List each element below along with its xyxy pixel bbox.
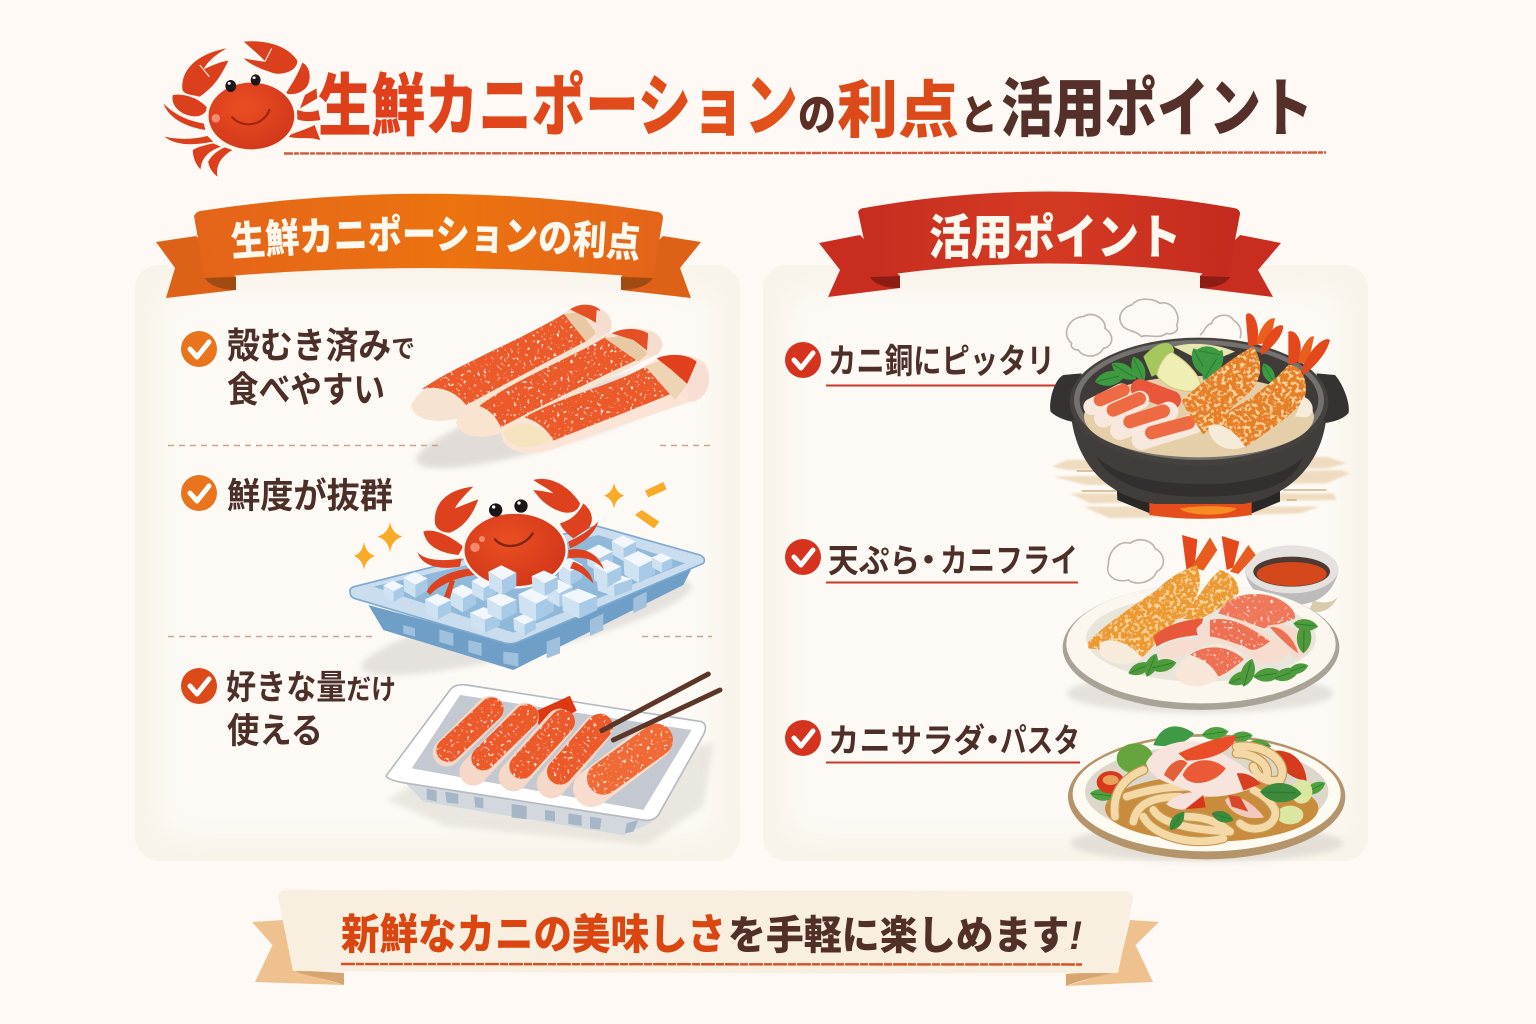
tempura shrimp	[1182, 313, 1330, 449]
closing message: 新鮮なカニの美味しさ	[341, 911, 726, 958]
use 3	[785, 720, 1080, 762]
underline	[826, 762, 1080, 764]
text: crab salad, pasta: パスタ	[1000, 722, 1080, 759]
text: tempura, crab fry: カニフライ	[940, 542, 1078, 579]
benefit 3	[181, 668, 396, 751]
underline	[826, 582, 1078, 584]
text: tempura, crab fry: 天ぷら	[828, 542, 920, 579]
icon: red check	[785, 720, 821, 756]
mat	[1052, 457, 1350, 518]
tempura	[1088, 535, 1256, 664]
vegetables	[1094, 342, 1277, 387]
salad greens and tomato	[1089, 726, 1328, 824]
title: 利点	[837, 77, 959, 146]
leg three	[501, 355, 709, 453]
base and burner	[1117, 485, 1280, 519]
banner underline	[341, 963, 1082, 966]
crab rolls	[1092, 388, 1193, 440]
ribbon heading: usage: 活用ポイント	[929, 212, 1181, 265]
title: の	[798, 91, 836, 140]
illustration: crab pasta plate	[1068, 726, 1345, 862]
icon: red check	[785, 539, 821, 575]
text: perfect for crab hotpot: カニ銅にピッタリ	[828, 343, 1055, 381]
noodles	[1115, 746, 1282, 841]
title underline	[284, 152, 1326, 154]
steam	[1067, 299, 1241, 356]
title: 生鮮カニポーション	[318, 69, 798, 145]
benefit 2	[181, 475, 393, 516]
crab	[417, 479, 604, 598]
icon: orange check	[181, 331, 217, 367]
text: peeled and easy to eat: 食べやすい	[227, 369, 385, 410]
text: tempura, crab fry: ・	[912, 542, 945, 579]
tray	[350, 526, 704, 670]
closing message	[341, 911, 1082, 958]
use 2	[785, 539, 1078, 582]
title	[318, 69, 1313, 146]
leg two	[456, 329, 663, 437]
text: use as much as you like: 好きな量だけ	[226, 669, 396, 707]
text: outstanding freshness: 鮮度が抜群	[227, 477, 393, 516]
illustration: tempura plate	[1063, 535, 1339, 713]
illustration: crab on ice tray	[350, 479, 704, 694]
crab pieces	[1153, 594, 1311, 687]
panel: benefits	[135, 265, 740, 861]
pot	[1050, 338, 1349, 504]
banner body	[278, 890, 1133, 973]
panel: usage points	[763, 265, 1368, 861]
text: peeled and easy to eat	[227, 325, 415, 410]
sauce bowl	[1245, 545, 1338, 612]
ice cubes	[383, 535, 672, 635]
crab portions	[447, 703, 657, 788]
icon: red check	[785, 342, 821, 378]
plate	[1063, 585, 1339, 710]
icon: orange-red check	[181, 668, 217, 704]
ribbon heading: benefits	[156, 194, 701, 298]
underline	[826, 384, 1055, 386]
chopsticks	[602, 674, 720, 740]
text: crab salad, pasta: カニサラダ	[828, 722, 985, 759]
title: 活用ポイント	[1001, 73, 1313, 145]
benefit 1	[181, 325, 415, 410]
text: use as much as you like: 使える	[227, 712, 323, 751]
illustration: three crab legs	[409, 305, 709, 487]
basil	[1165, 780, 1303, 833]
ribbon tails	[252, 920, 1159, 986]
greens	[1126, 616, 1319, 689]
plate	[1068, 734, 1345, 859]
closing message: を手軽に楽しめます!	[728, 914, 1082, 958]
title: と	[960, 92, 998, 139]
ribbon heading: benefits: 生鮮カニポーションの利点	[231, 214, 640, 261]
text: crab salad, pasta	[828, 722, 1080, 759]
icon: orange check	[181, 475, 217, 511]
text: tempura, crab fry	[828, 542, 1078, 579]
leg one	[411, 305, 612, 421]
crab meat topping	[1146, 736, 1264, 818]
steam	[1108, 540, 1163, 583]
bottom banner	[252, 890, 1159, 986]
tray	[386, 685, 705, 835]
text: peeled and easy to eat: 殻むき済みで	[227, 325, 415, 366]
icon: title crab mascot	[163, 41, 320, 177]
text: use as much as you like	[226, 669, 396, 751]
illustration: hotpot	[1050, 299, 1350, 519]
illustration: portion tray with chopsticks	[386, 674, 720, 845]
dashed dividers	[168, 446, 712, 636]
ribbon heading: usage	[819, 192, 1281, 297]
lemon	[1157, 353, 1201, 391]
use 1	[785, 342, 1055, 386]
sparkles	[354, 482, 667, 570]
text: crab salad, pasta: ・	[976, 722, 1009, 759]
